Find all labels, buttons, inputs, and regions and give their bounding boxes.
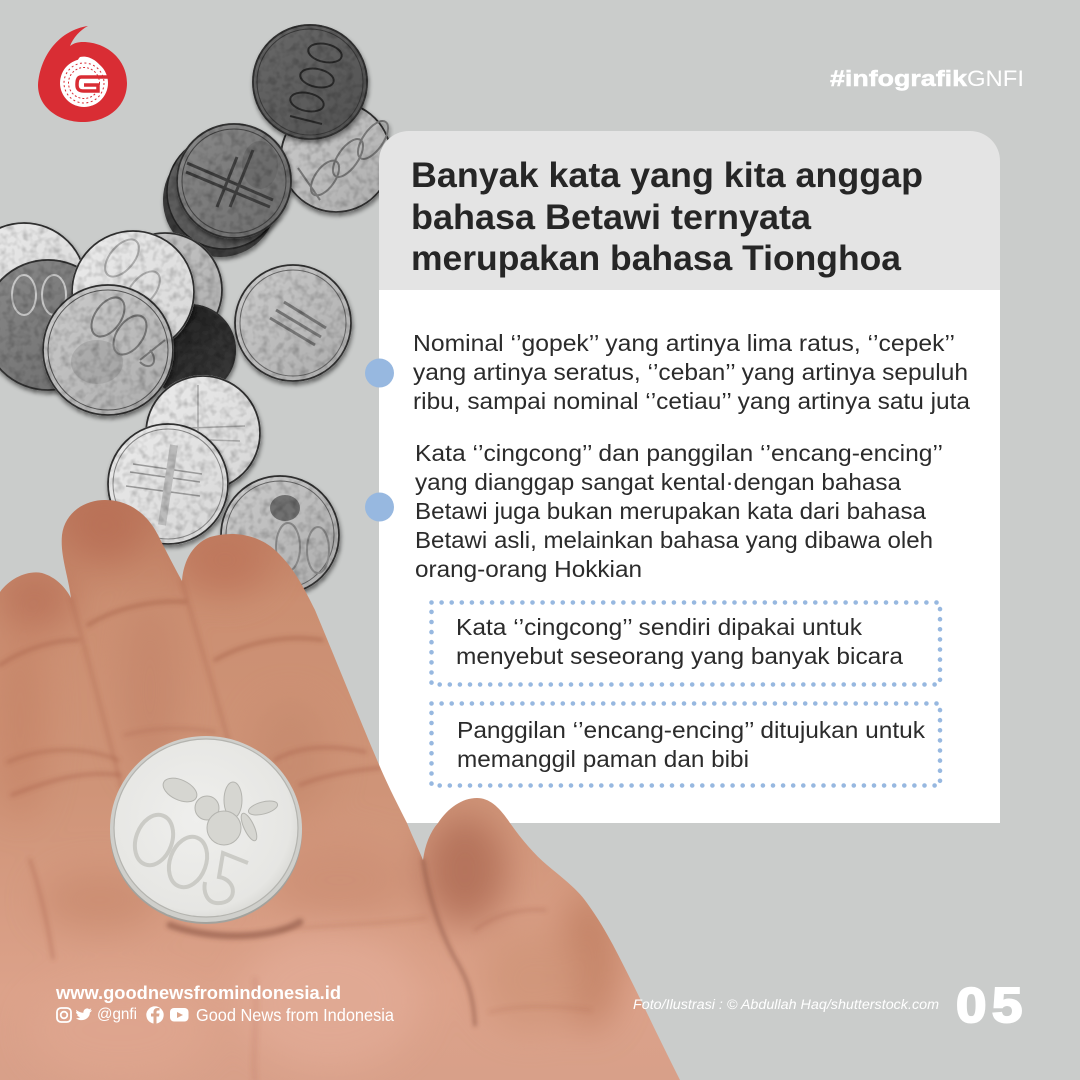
bullet: second: [365, 492, 394, 522]
coin: 1000 rupiah garuda: [220, 475, 340, 595]
icon: twitter: [76, 1008, 92, 1020]
title: merupakan bahasa Tionghoa: [411, 239, 902, 278]
panel: content card: [379, 131, 1000, 823]
text block: nominal: Nominal ‘’gopek’’ yang artinya lima ratus, ‘’cepek’’: [413, 330, 955, 356]
title: bahasa Betawi ternyata: [411, 198, 812, 237]
photo credit: Foto/Ilustrasi : © Abdullah Haq/shutterstock.com: [633, 997, 939, 1012]
coin: angklung light: [145, 375, 261, 491]
text block: nominal: ribu, sampai nominal ‘’cetiau’’ yang artinya satu juta: [413, 388, 971, 414]
coin: light far left: [0, 222, 87, 348]
coin: front 500: [42, 284, 174, 416]
coin digits: [128, 809, 248, 903]
footer: website and socials: [55, 982, 394, 1025]
text block: cingcong: orang-orang Hokkian: [415, 556, 642, 582]
dotted box: cingcong: menyebut seseorang yang banyak bicara: [456, 643, 904, 669]
finger gaps and creases: [0, 581, 590, 1080]
dotted box: encang-encing: [432, 704, 940, 786]
coin: black: [144, 304, 236, 396]
text block: cingcong: Kata ‘’cingcong’’ dan panggilan ‘’encang-encing’’: [415, 440, 943, 466]
panel body background: [379, 290, 1000, 823]
coin: angklung stack back: [163, 135, 281, 257]
skin shading: [0, 487, 620, 1080]
coin: light 500: [71, 230, 195, 354]
coin flower: [159, 773, 279, 845]
dotted box: encang-encing: memanggil paman dan bibi: [457, 746, 749, 772]
icon: youtube: [170, 1008, 188, 1022]
title: [411, 156, 923, 278]
coin: angklung right: [234, 264, 352, 382]
text block: nominal: [413, 330, 971, 414]
text block: cingcong: Betawi juga bukan merupakan kata dari bahasa: [415, 498, 927, 524]
text block: cingcong: yang dianggap sangat kental·dengan bahasa: [415, 469, 902, 495]
icon: instagram: [57, 1008, 71, 1022]
coin: angklung lower: [107, 423, 229, 545]
dotted box: encang-encing: Panggilan ‘’encang-encing’’ ditujukan untuk: [457, 717, 925, 743]
footer: website and socials: www.goodnewsfromindonesia.id: [55, 982, 341, 1003]
text block: cingcong: Betawi asli, melainkan bahasa yang dibawa oleh: [415, 527, 933, 553]
coin: 500 rupiah on hand: [110, 736, 302, 924]
footer: website and socials: @gnfi: [97, 1006, 137, 1023]
bullet: first: [365, 358, 394, 388]
dotted box: cingcong: Kata ‘’cingcong’’ sendiri dipakai untuk: [456, 614, 862, 640]
panel header background: [379, 131, 1000, 290]
text block: cingcong: [415, 440, 943, 582]
icon: facebook: [146, 1006, 164, 1024]
text block: nominal: yang artinya seratus, ‘’ceban’’ yang artinya sepuluh: [413, 359, 968, 385]
logo: [38, 26, 127, 122]
hand: [0, 487, 700, 1080]
coin: grey 1000 left: [0, 259, 114, 391]
logo emblem: [60, 57, 108, 107]
hashtag: #infografik: [830, 66, 968, 91]
coin: 1000 rupiah dark: [252, 24, 368, 140]
dotted box: cingcong: [432, 602, 940, 684]
hashtag: [830, 66, 1024, 91]
coin: mid behind: [107, 232, 223, 348]
coin pile: [0, 24, 394, 595]
title: Banyak kata yang kita anggap: [411, 156, 923, 195]
page number: 05: [956, 979, 1022, 1033]
footer: website and socials: Good News from Indonesia: [196, 1005, 394, 1025]
coin: 1000 rupiah behind: [280, 101, 394, 213]
coin: angklung stack front: [176, 123, 292, 239]
logo mark: [38, 26, 127, 122]
hashtag: GNFI: [967, 66, 1024, 91]
